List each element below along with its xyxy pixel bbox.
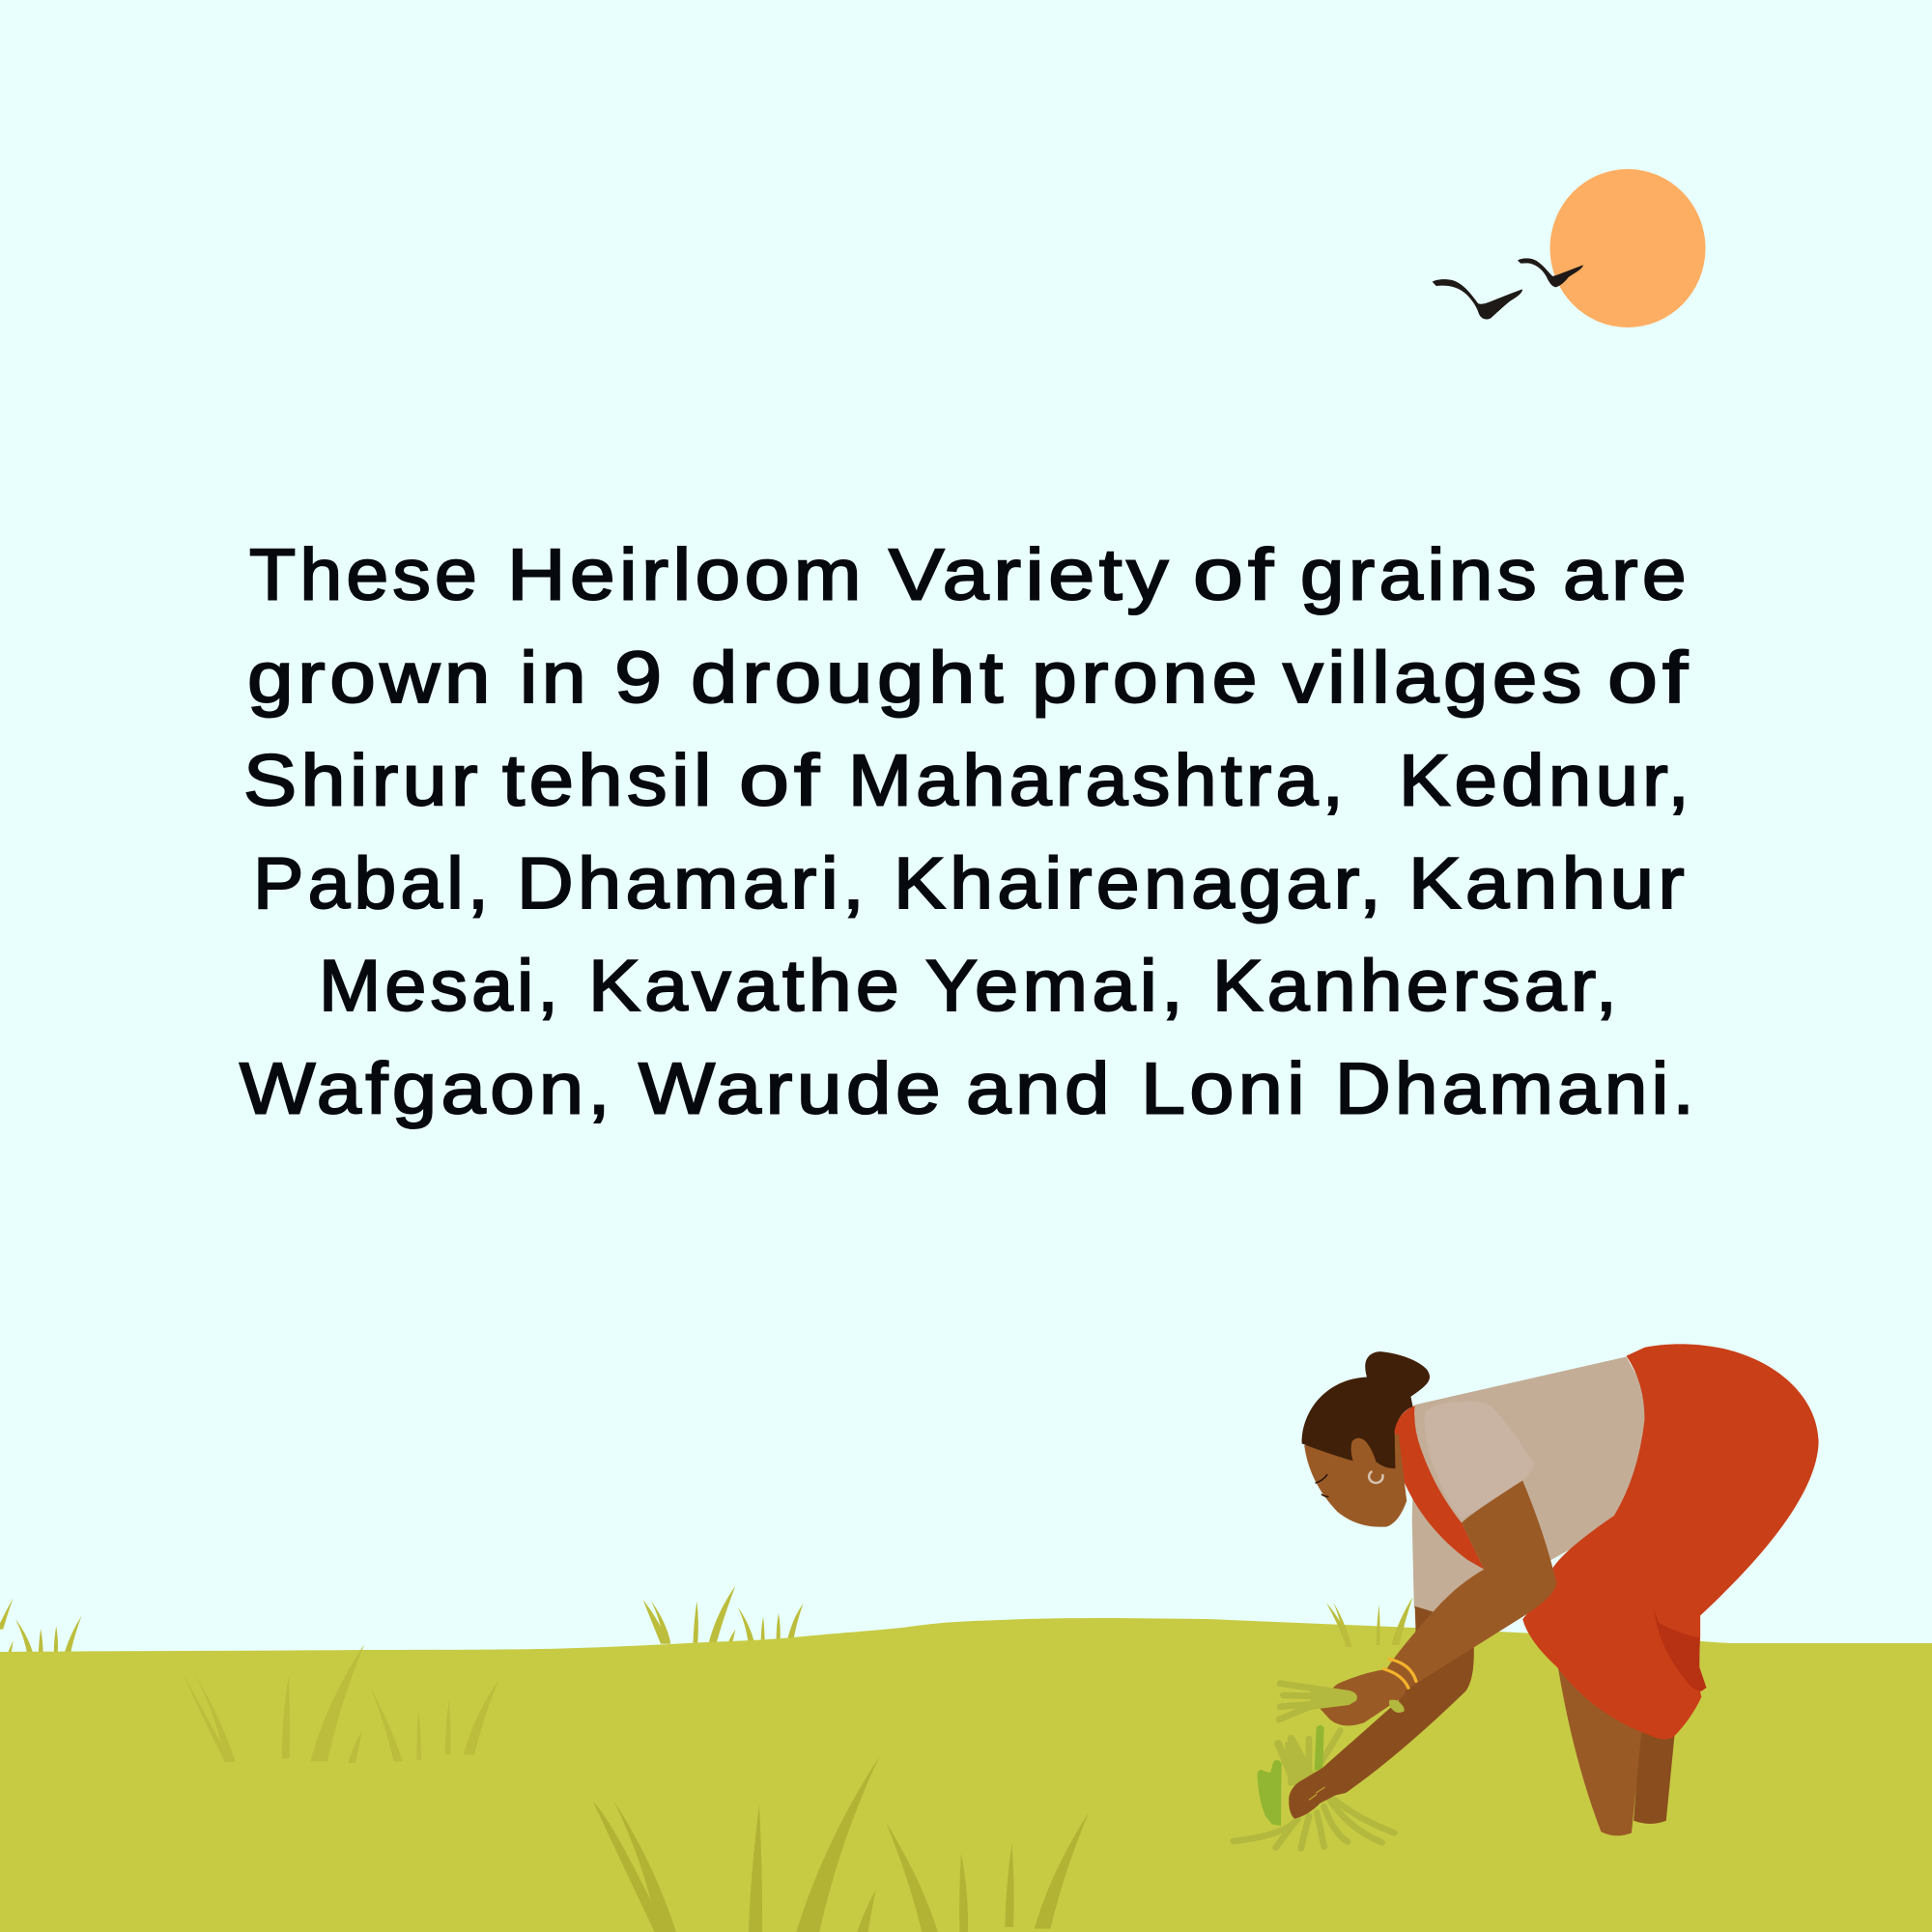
text block: villages: Variety bbox=[889, 533, 1173, 614]
text block: villages: in bbox=[520, 637, 590, 718]
earring bbox=[1369, 1471, 1382, 1483]
seedlings in lower hand bbox=[1234, 1725, 1394, 1848]
text block: villages: are bbox=[1563, 533, 1690, 614]
ground bbox=[0, 1618, 1932, 1932]
text block: villages: Wafgaon, bbox=[240, 1048, 614, 1129]
text block: villages: Heirloom bbox=[507, 533, 866, 614]
face bbox=[1304, 1435, 1406, 1527]
text block: villages: Dhamani. bbox=[1335, 1048, 1698, 1129]
text block: villages: 9 bbox=[614, 637, 667, 718]
seedling clump on wrist bbox=[1389, 1700, 1405, 1713]
text block: villages: tehsil bbox=[502, 739, 716, 820]
text block: villages: of bbox=[1193, 533, 1278, 614]
front arm bbox=[1320, 1481, 1556, 1725]
grass tuft: foreground bbox=[593, 1756, 1089, 1932]
grass tufts on horizon bbox=[0, 1586, 803, 1658]
text block: villages: Kanhersar, bbox=[1212, 945, 1621, 1026]
icon: sun bbox=[1549, 169, 1706, 327]
text block: villages: of bbox=[739, 739, 824, 820]
lower hand bbox=[1289, 1761, 1352, 1819]
text block: villages: Khairenagar, bbox=[894, 842, 1385, 923]
bangles bbox=[1384, 1659, 1416, 1688]
sleeve bbox=[1425, 1401, 1534, 1520]
text block: villages: Dhamari, bbox=[517, 842, 868, 923]
text block: villages: Kavathe bbox=[588, 945, 903, 1026]
text block: villages: Maharashtra, bbox=[848, 739, 1348, 820]
woman planting rice bbox=[1302, 1344, 1819, 1835]
text block: villages: These bbox=[249, 533, 481, 614]
text block: villages: Kanhur bbox=[1408, 842, 1689, 923]
icon: birds bbox=[1433, 258, 1583, 320]
text block: villages: grains bbox=[1300, 533, 1541, 614]
hair bbox=[1302, 1351, 1430, 1468]
eyelashes bbox=[1316, 1474, 1328, 1496]
seedlings in upper hand bbox=[1279, 1684, 1405, 1719]
sash bbox=[1394, 1406, 1484, 1569]
finger highlights bbox=[1309, 1787, 1325, 1800]
text block: villages: Warude bbox=[639, 1048, 945, 1129]
text block: villages bbox=[240, 533, 1698, 1129]
text block: villages: and bbox=[966, 1048, 1114, 1129]
text block: villages: Mesai, bbox=[319, 945, 562, 1026]
text block: villages: of bbox=[1607, 637, 1692, 718]
back leg bbox=[1634, 1726, 1675, 1824]
text block: villages: drought bbox=[691, 637, 1008, 718]
text block: villages: villages bbox=[1283, 637, 1586, 718]
text block: villages: Kednur, bbox=[1399, 739, 1693, 820]
grass tuft: middle ground bbox=[183, 1644, 499, 1763]
blouse bbox=[1412, 1356, 1659, 1612]
front leg bbox=[1558, 1667, 1642, 1835]
skirt fold bbox=[1654, 1610, 1706, 1691]
text block: villages: Shirur bbox=[243, 739, 482, 820]
text block: villages: prone bbox=[1032, 637, 1262, 718]
grass behind woman bbox=[1326, 1597, 1413, 1647]
back arm bbox=[1323, 1606, 1474, 1797]
text block: villages: Yemai, bbox=[925, 945, 1187, 1026]
text block: villages: Pabal, bbox=[253, 842, 493, 923]
skirt bbox=[1522, 1344, 1819, 1740]
text block: villages: Loni bbox=[1141, 1048, 1309, 1129]
text block: villages: grown bbox=[247, 637, 495, 718]
